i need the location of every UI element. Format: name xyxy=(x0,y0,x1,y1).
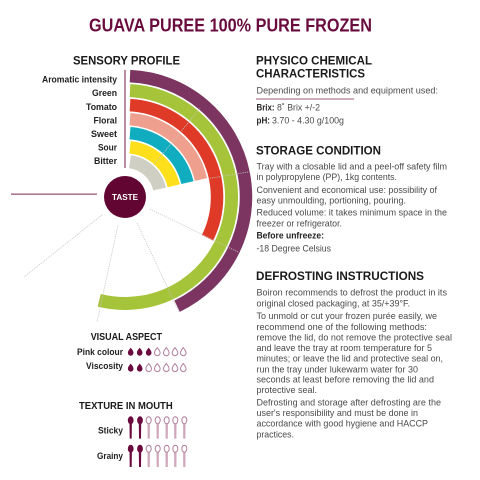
dotted radial guides xyxy=(24,108,250,322)
heading: physico chemical: PHYSICO CHEMICAL xyxy=(256,53,372,67)
sensory attribute labels xyxy=(42,74,118,166)
defrosting text: minutes; or leave the lid and protective seal on, xyxy=(256,354,443,365)
storage text: easy unmoulding, portioning, pouring. xyxy=(256,195,406,206)
storage text: freezer or refrigerator. xyxy=(256,218,342,229)
heading: physico chemical xyxy=(256,53,372,81)
storage text: in polypropylene (PP), 1kg contents. xyxy=(256,172,397,183)
vertical axis line xyxy=(124,70,126,168)
heading: defrosting instructions: DEFROSTING INSTRUCTIONS xyxy=(256,269,424,283)
row: sticky: Sticky xyxy=(98,426,124,436)
sensory attribute labels: Sweet xyxy=(91,129,117,139)
storage text: Convenient and economical use: possibility of xyxy=(256,185,437,196)
radial chart arcs xyxy=(99,76,246,306)
row: viscosity: Viscosity xyxy=(86,361,124,371)
brix value xyxy=(256,103,320,114)
taste circle xyxy=(104,176,146,218)
title: GUAVA PUREE 100% PURE FROZEN xyxy=(89,14,372,35)
panel: defrosting instructions xyxy=(256,269,452,440)
sensory attribute labels: Aromatic intensity xyxy=(42,74,118,84)
taste circle: TASTE xyxy=(112,192,138,202)
sensory attribute labels: Tomato xyxy=(86,102,117,112)
storage text xyxy=(256,162,447,255)
defrosting text: Boiron recommends to defrost the product in its xyxy=(256,288,447,299)
defrosting text: run the tray under lukewarm water for 30 xyxy=(256,364,418,375)
horizontal axis line xyxy=(11,194,97,195)
intro text: Depending on methods and equipment used: xyxy=(256,85,438,96)
panel: visual aspect xyxy=(77,332,186,372)
ph value: pH: xyxy=(256,116,270,127)
defrosting text: original closed packaging, at 35/+39°F. xyxy=(256,299,410,310)
panel: physico chemical characteristics xyxy=(256,53,438,127)
row: grainy: Grainy xyxy=(97,451,124,461)
defrosting text: accordance with good hygiene and HACCP xyxy=(256,419,428,430)
heading: sensory profile: SENSORY PROFILE xyxy=(73,54,180,68)
defrosting text: recommend one of the following methods: xyxy=(256,322,427,333)
defrosting text: remove the lid, do not remove the protective seal xyxy=(256,332,452,343)
panel: texture in mouth xyxy=(79,401,187,467)
defrosting text: user's responsibility and must be done in xyxy=(256,408,418,419)
storage text: Before unfreeze: xyxy=(256,231,324,242)
brix value: 8˚ Brix +/-2 xyxy=(277,103,320,114)
sensory attribute labels: Green xyxy=(92,88,117,98)
heading: storage condition: STORAGE CONDITION xyxy=(256,143,381,157)
row: pink colour: Pink colour xyxy=(77,347,123,357)
defrosting text: and leave the tray at room temperature for 5 xyxy=(256,343,432,354)
defrosting text: seconds at least before removing the lid and xyxy=(256,375,434,386)
heading: texture in mouth: TEXTURE IN MOUTH xyxy=(79,401,173,412)
heading: physico chemical: CHARACTERISTICS xyxy=(256,67,365,81)
sensory attribute labels: Floral xyxy=(94,116,117,126)
heading: visual aspect: VISUAL ASPECT xyxy=(91,332,162,343)
defrosting text: Defrosting and storage after defrosting are the xyxy=(256,398,441,409)
sensory attribute labels: Bitter xyxy=(94,156,117,166)
ph value: 3.70 - 4.30 g/100g xyxy=(272,116,344,127)
storage text: Tray with a closable lid and a peel-off safety film xyxy=(256,162,447,173)
defrosting text xyxy=(256,288,452,440)
panel: sensory profile xyxy=(11,54,250,322)
storage text: Reduced volume: it takes minimum space in the xyxy=(256,208,447,219)
panel: storage condition xyxy=(256,143,447,255)
defrosting text: To unmold or cut your frozen purée easily, we xyxy=(256,311,437,322)
defrosting text: practices. xyxy=(256,429,294,440)
brix value: Brix: xyxy=(256,103,274,114)
sensory attribute labels: Sour xyxy=(98,142,117,152)
defrosting text: protective seal. xyxy=(256,385,317,396)
storage text: -18 Degree Celsius xyxy=(256,244,331,255)
